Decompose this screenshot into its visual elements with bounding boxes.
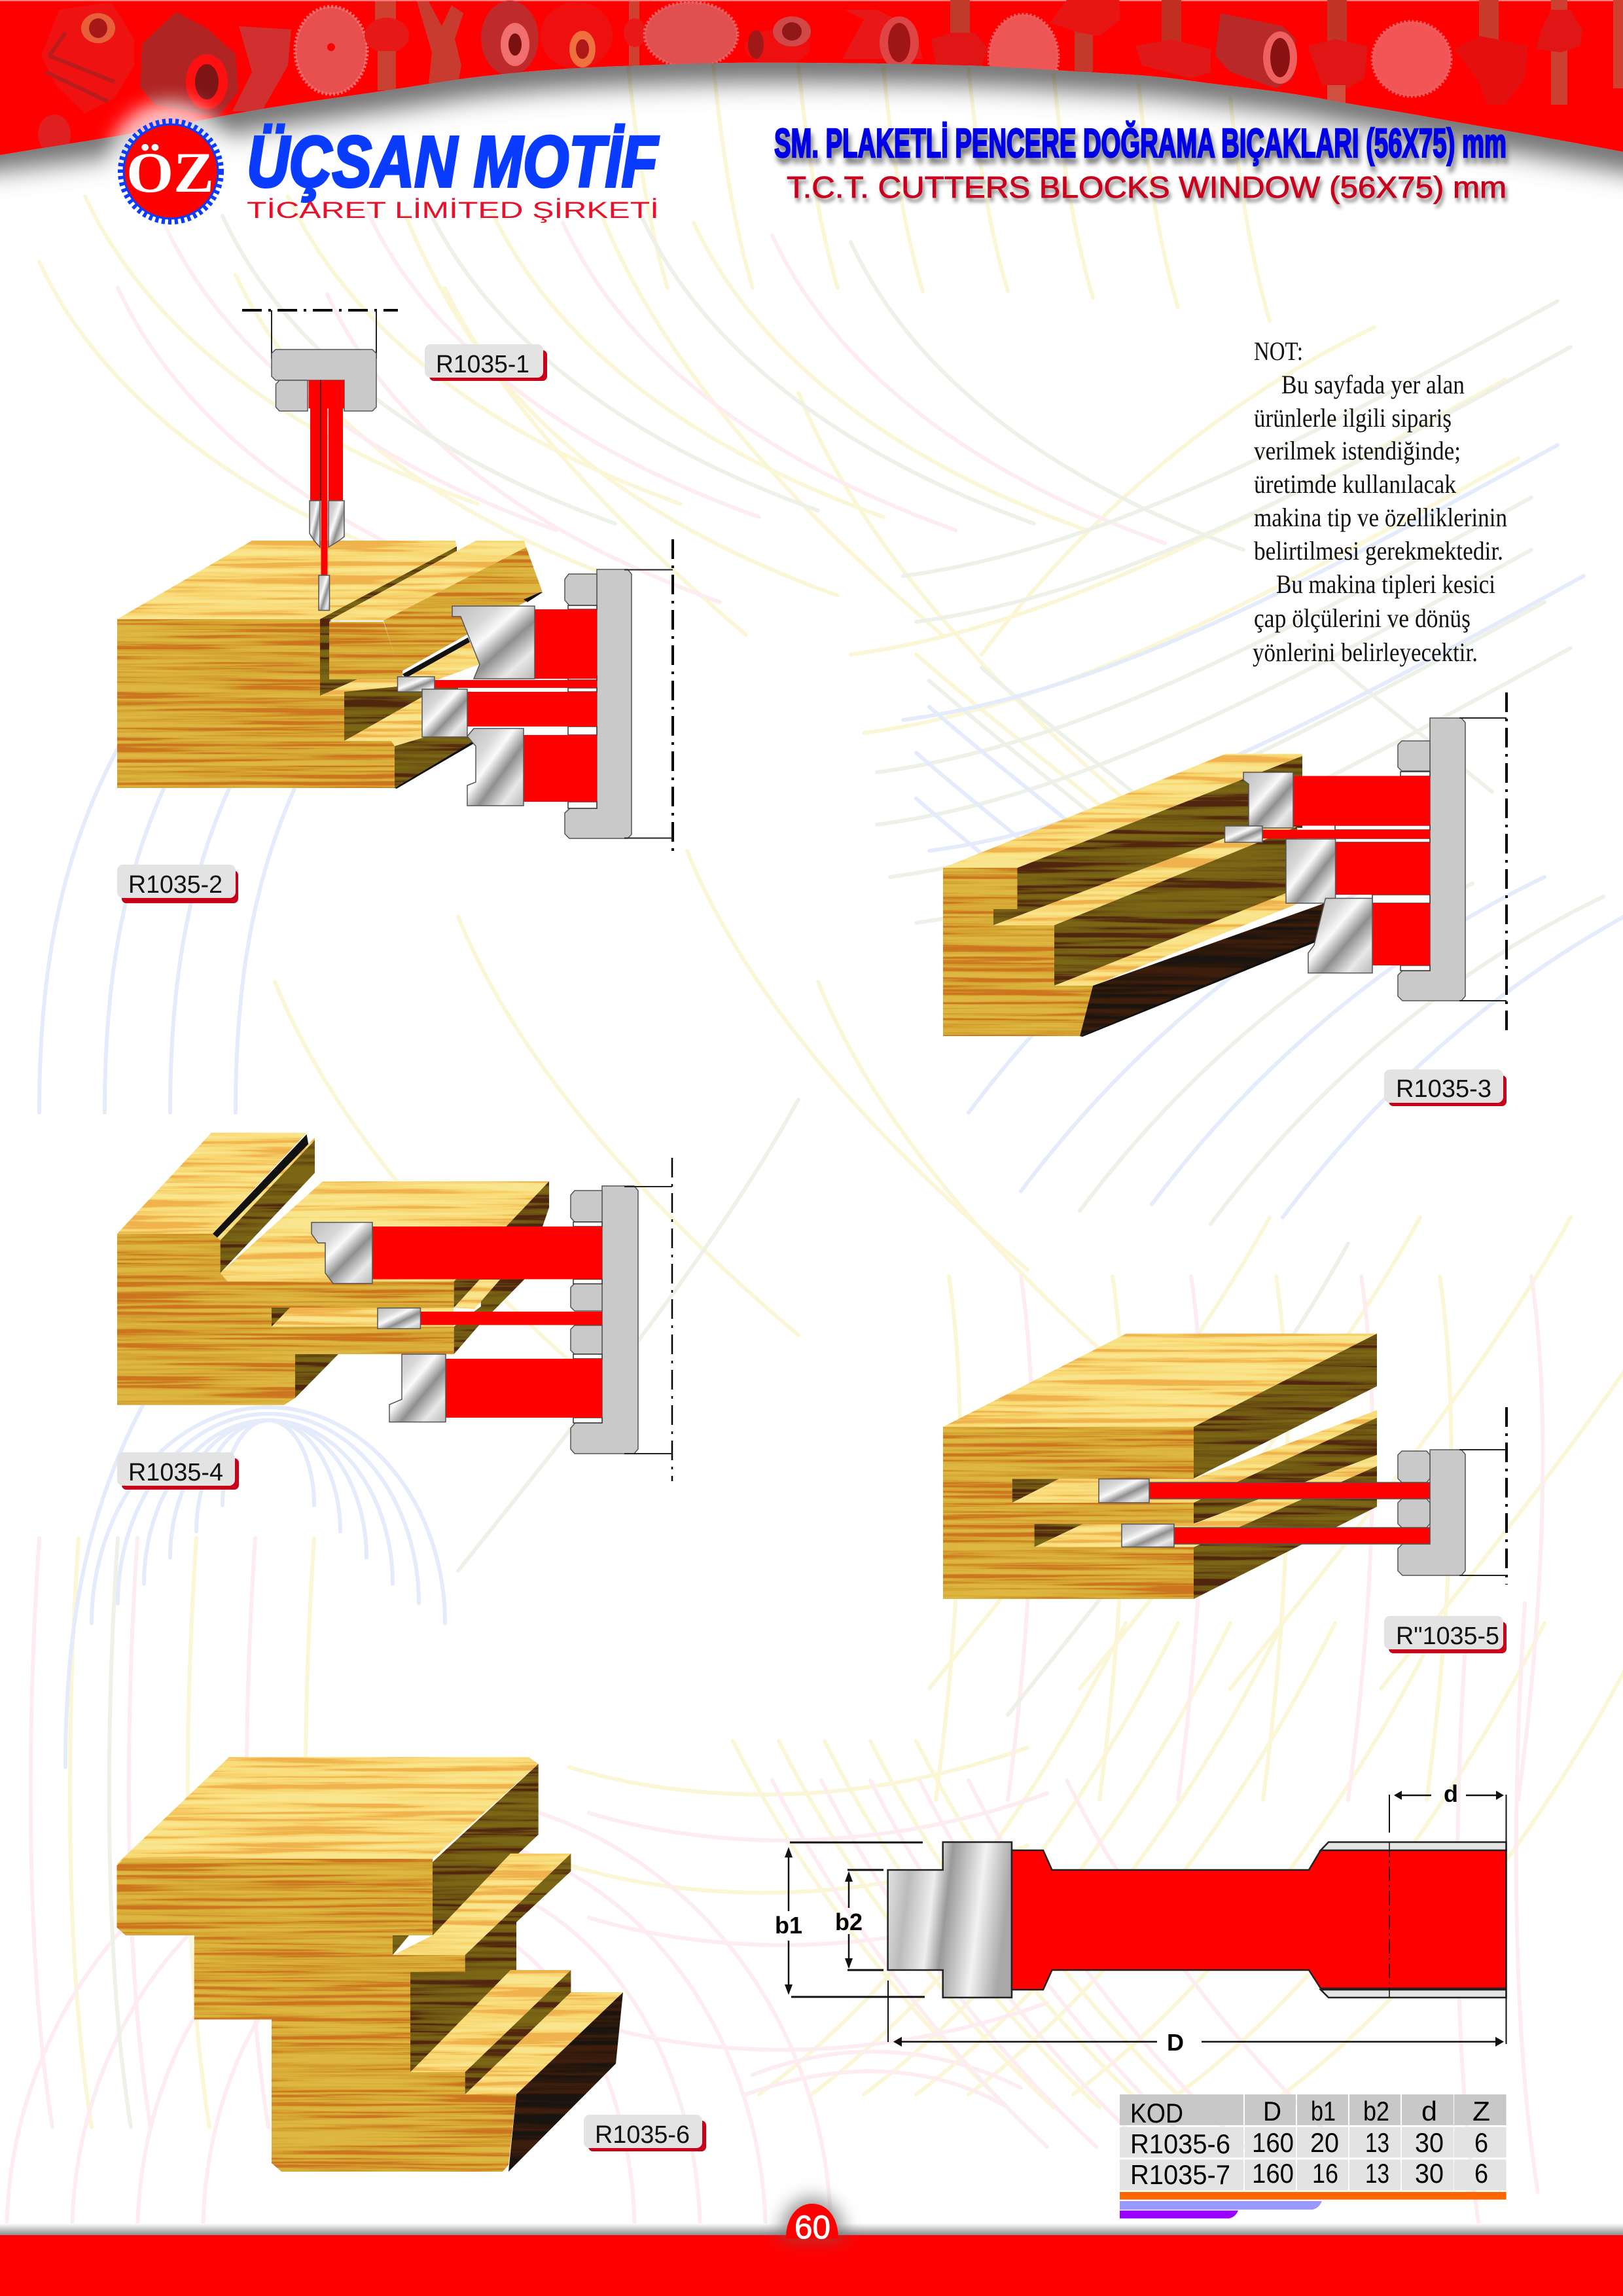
page number badge	[780, 2198, 844, 2246]
panel: R1035-3 wood profile	[943, 754, 1325, 1037]
table row R1035-6: 20	[1310, 2127, 1339, 2158]
dimension labels: b2	[835, 1909, 863, 1935]
table header text	[1130, 2096, 1490, 2128]
panel: R"1035-5 cutter head	[1099, 1407, 1507, 1585]
label: R"1035-5	[1384, 1616, 1507, 1653]
tool: cutter 1	[41, 2, 134, 113]
note text block: verilmek istendiğinde;	[1254, 436, 1461, 465]
tool: saw blade 3	[989, 14, 1058, 99]
label: R"1035-5: R"1035-5	[1396, 1623, 1499, 1650]
panel: R1035-6 wood profile	[116, 1757, 623, 2172]
tool: router bit 5	[1135, 0, 1211, 79]
cutter tip	[888, 1842, 1012, 1998]
logo: gear	[122, 123, 219, 220]
data table	[1120, 2094, 1507, 2190]
table row R1035-6: R1035-6	[1130, 2128, 1230, 2159]
table row R1035-6	[1130, 2127, 1488, 2159]
tool: saw blade 4	[1372, 22, 1451, 96]
panel: R"1035-5 wood profile	[943, 1334, 1377, 1599]
tool: arm cutter	[232, 26, 291, 111]
table row R1035-7: R1035-7	[1130, 2159, 1230, 2190]
panel: R1035-2 cutter head	[398, 539, 673, 857]
tool: router bit 8	[1536, 0, 1582, 105]
table header text: b1	[1311, 2096, 1336, 2126]
tool: router bit 2	[624, 1, 646, 65]
label: R1035-3: R1035-3	[1396, 1075, 1491, 1103]
label: R1035-4: R1035-4	[128, 1459, 223, 1486]
tool: router bit 3	[931, 0, 988, 65]
company logo	[109, 101, 233, 226]
note text block: NOT:	[1254, 336, 1303, 366]
note text block: Bu sayfada yer alan	[1281, 370, 1465, 399]
table header text: D	[1263, 2096, 1281, 2126]
panel: R1035-4 cutter head	[312, 1158, 672, 1481]
note text block: yönlerini belirleyecektir.	[1253, 637, 1478, 667]
label: R1035-3	[1384, 1069, 1507, 1106]
table row R1035-7: 160	[1252, 2158, 1294, 2189]
cutter body	[1012, 1850, 1507, 1990]
table header text: Z	[1472, 2096, 1490, 2126]
label: R1035-6	[584, 2115, 706, 2151]
label: R1035-1: R1035-1	[436, 351, 529, 378]
body end strips	[1321, 1842, 1507, 1998]
table row R1035-6: 13	[1365, 2127, 1389, 2158]
table header text: d	[1421, 2096, 1437, 2126]
dimension labels: D	[1167, 2029, 1184, 2056]
tool: small fragment	[38, 115, 71, 154]
logo: initials: ÖZ	[126, 141, 214, 205]
panel: R1035-3 cutter head	[1225, 692, 1507, 1033]
dimension labels: b1	[775, 1912, 802, 1939]
table row R1035-7: 13	[1365, 2158, 1389, 2189]
panel: R1035-2 wood profile	[117, 541, 543, 789]
red header band with tool images	[0, 0, 1623, 157]
panel: R1035-4 wood profile	[117, 1133, 549, 1405]
label: R1035-2	[117, 865, 238, 903]
note text block: ürünlerle ilgili sipariş	[1254, 403, 1452, 433]
table row R1035-6: 30	[1415, 2127, 1444, 2158]
tool: router bit 1	[365, 1, 409, 90]
company subtitle: TİCARET LİMİTED ŞİRKETİ	[247, 198, 659, 223]
page subtitle: T.C.T. CUTTERS BLOCKS WINDOW (56X75) mm	[787, 170, 1507, 204]
table body cells	[1120, 2127, 1507, 2190]
table row R1035-7: 30	[1415, 2158, 1444, 2189]
dimension labels	[775, 1780, 1458, 2056]
panel: dimension diagram	[775, 1780, 1507, 2056]
dimension labels: d	[1444, 1780, 1458, 1807]
table row R1035-6: 6	[1474, 2127, 1488, 2158]
tool: saw blade 2	[645, 2, 738, 67]
label: R1035-1	[425, 344, 547, 381]
table header text: b2	[1363, 2096, 1389, 2126]
tool: cutter 3	[541, 2, 613, 69]
tool: clamp	[417, 1, 463, 83]
tool: block cutter	[140, 12, 238, 118]
footer band	[0, 2223, 1623, 2296]
table row R1035-7: 16	[1312, 2158, 1338, 2189]
note text block: Bu makina tipleri kesici	[1276, 569, 1495, 599]
tool: ring cutter 2	[842, 10, 923, 69]
table row R1035-7: 6	[1474, 2158, 1488, 2189]
panel: R1035-1 top cutter	[242, 310, 398, 610]
label: R1035-4	[117, 1452, 239, 1490]
page number badge: 60	[794, 2209, 830, 2246]
tool: saw blade 1	[295, 7, 367, 94]
tool: cutter 2	[481, 1, 539, 75]
tool: router bit 4	[1050, 0, 1120, 72]
tool: router bit 6	[1308, 0, 1368, 105]
tool: router bit 9	[1613, 0, 1623, 88]
table row R1035-7	[1130, 2158, 1488, 2190]
label: R1035-2: R1035-2	[128, 871, 223, 899]
tool: router bit 7	[1454, 0, 1528, 105]
note text block: çap ölçülerini ve dönüş	[1254, 603, 1471, 633]
note text block	[1253, 336, 1507, 667]
tool: block cutter 2	[1215, 13, 1297, 88]
colour bars under table	[1120, 2192, 1507, 2219]
company name: ÜÇSAN MOTİF	[247, 122, 659, 202]
header shadow under curve	[0, 63, 1623, 162]
label: R1035-6: R1035-6	[595, 2121, 690, 2149]
tool: ring cutter 1	[745, 16, 811, 65]
note text block: belirtilmesi gerekmektedir.	[1254, 536, 1503, 565]
dimension arrows	[785, 1791, 1504, 2047]
note text block: üretimde kullanılacak	[1254, 469, 1456, 499]
table header text: KOD	[1130, 2098, 1183, 2128]
table header row	[1120, 2094, 1507, 2125]
table row R1035-6: 160	[1252, 2127, 1294, 2158]
note text block: makina tip ve özelliklerinin	[1254, 503, 1507, 532]
